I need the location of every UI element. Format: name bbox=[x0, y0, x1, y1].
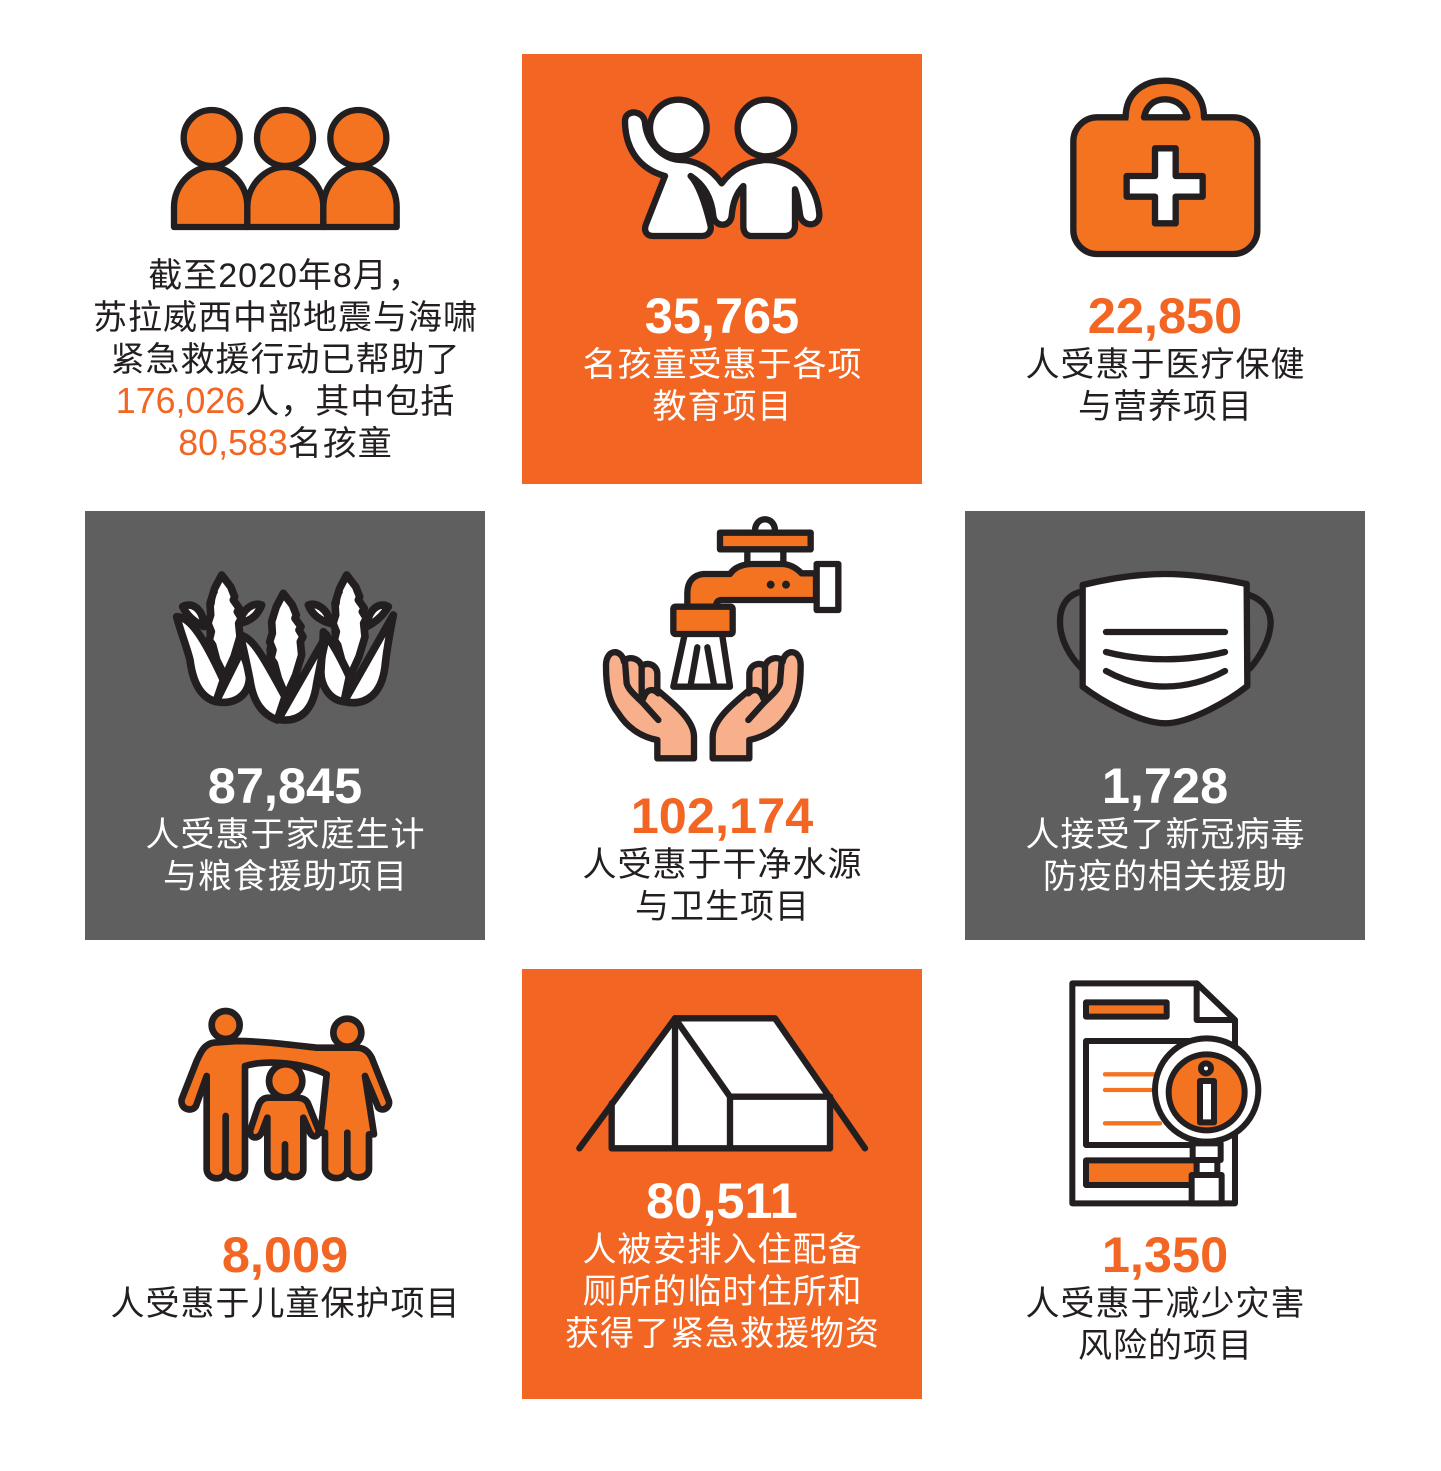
label: livelihood: 与粮食援助项目 bbox=[163, 858, 408, 896]
panel: livelihood bbox=[85, 511, 485, 940]
label: health bbox=[1026, 346, 1306, 426]
label: disaster risk reduction bbox=[1026, 1285, 1306, 1365]
summary text bbox=[93, 257, 478, 463]
stat: 22,850: 22,850 bbox=[1088, 287, 1242, 344]
stat: 102,174: 102,174 bbox=[631, 787, 813, 844]
stat: 8,009: 8,009 bbox=[222, 1226, 348, 1283]
summary text: 176,026人，其中包括 bbox=[116, 381, 455, 421]
stat: 1,350: 1,350 bbox=[1102, 1226, 1228, 1283]
panel: covid-19 bbox=[965, 511, 1365, 940]
icon: document and magnifier bbox=[1069, 980, 1262, 1206]
label: water: 人受惠于干净水源 bbox=[582, 846, 862, 884]
label: health: 人受惠于医疗保健 bbox=[1026, 346, 1306, 384]
label: water bbox=[582, 846, 862, 926]
panel: disaster risk reduction bbox=[1026, 980, 1306, 1365]
panel: child protection bbox=[110, 1008, 460, 1323]
icon: three people bbox=[170, 106, 400, 230]
label: shelter: 厕所的临时住所和 bbox=[582, 1273, 862, 1311]
icon: two children bbox=[622, 96, 822, 240]
stat: 80,511: 80,511 bbox=[646, 1172, 798, 1229]
label: covid-19 bbox=[1026, 816, 1306, 896]
label: livelihood: 人受惠于家庭生计 bbox=[146, 816, 426, 854]
panel: shelter bbox=[522, 969, 922, 1399]
label: shelter: 获得了紧急救援物资 bbox=[565, 1315, 880, 1353]
label: covid-19: 防疫的相关援助 bbox=[1043, 858, 1288, 896]
label: education bbox=[582, 346, 862, 426]
label: covid-19: 人接受了新冠病毒 bbox=[1026, 816, 1306, 854]
icon: family bbox=[178, 1008, 392, 1182]
label: disaster risk reduction: 风险的项目 bbox=[1078, 1327, 1253, 1365]
panel: health bbox=[1026, 78, 1306, 426]
icon: tent bbox=[576, 1015, 868, 1152]
label: shelter bbox=[565, 1231, 880, 1353]
icon: corn bbox=[172, 571, 398, 724]
label: education: 教育项目 bbox=[652, 388, 792, 426]
panel: overall summary bbox=[93, 106, 478, 463]
label: health: 与营养项目 bbox=[1078, 388, 1253, 426]
icon: medical kit bbox=[1070, 78, 1260, 258]
summary text: 苏拉威西中部地震与海啸 bbox=[93, 299, 478, 337]
label: child protection: 人受惠于儿童保护项目 bbox=[110, 1285, 460, 1323]
label: shelter: 人被安排入住配备 bbox=[582, 1231, 862, 1269]
stat: 1,728: 1,728 bbox=[1102, 757, 1228, 814]
summary text: 紧急救援行动已帮助了 bbox=[110, 341, 460, 379]
summary text: 80,583名孩童 bbox=[178, 423, 393, 463]
icon: face mask bbox=[1056, 570, 1274, 726]
panel: water and sanitation bbox=[582, 516, 862, 926]
stat: 35,765: 35,765 bbox=[645, 287, 799, 344]
label: water: 与卫生项目 bbox=[635, 888, 810, 926]
summary text: 截至2020年8月， bbox=[148, 257, 423, 295]
label: education: 名孩童受惠于各项 bbox=[582, 346, 862, 384]
label: disaster risk reduction: 人受惠于减少灾害 bbox=[1026, 1285, 1306, 1323]
label: livelihood bbox=[146, 816, 426, 896]
icon: tap and hands bbox=[602, 516, 842, 762]
stat: 87,845: 87,845 bbox=[208, 757, 362, 814]
panel: education bbox=[522, 54, 922, 484]
